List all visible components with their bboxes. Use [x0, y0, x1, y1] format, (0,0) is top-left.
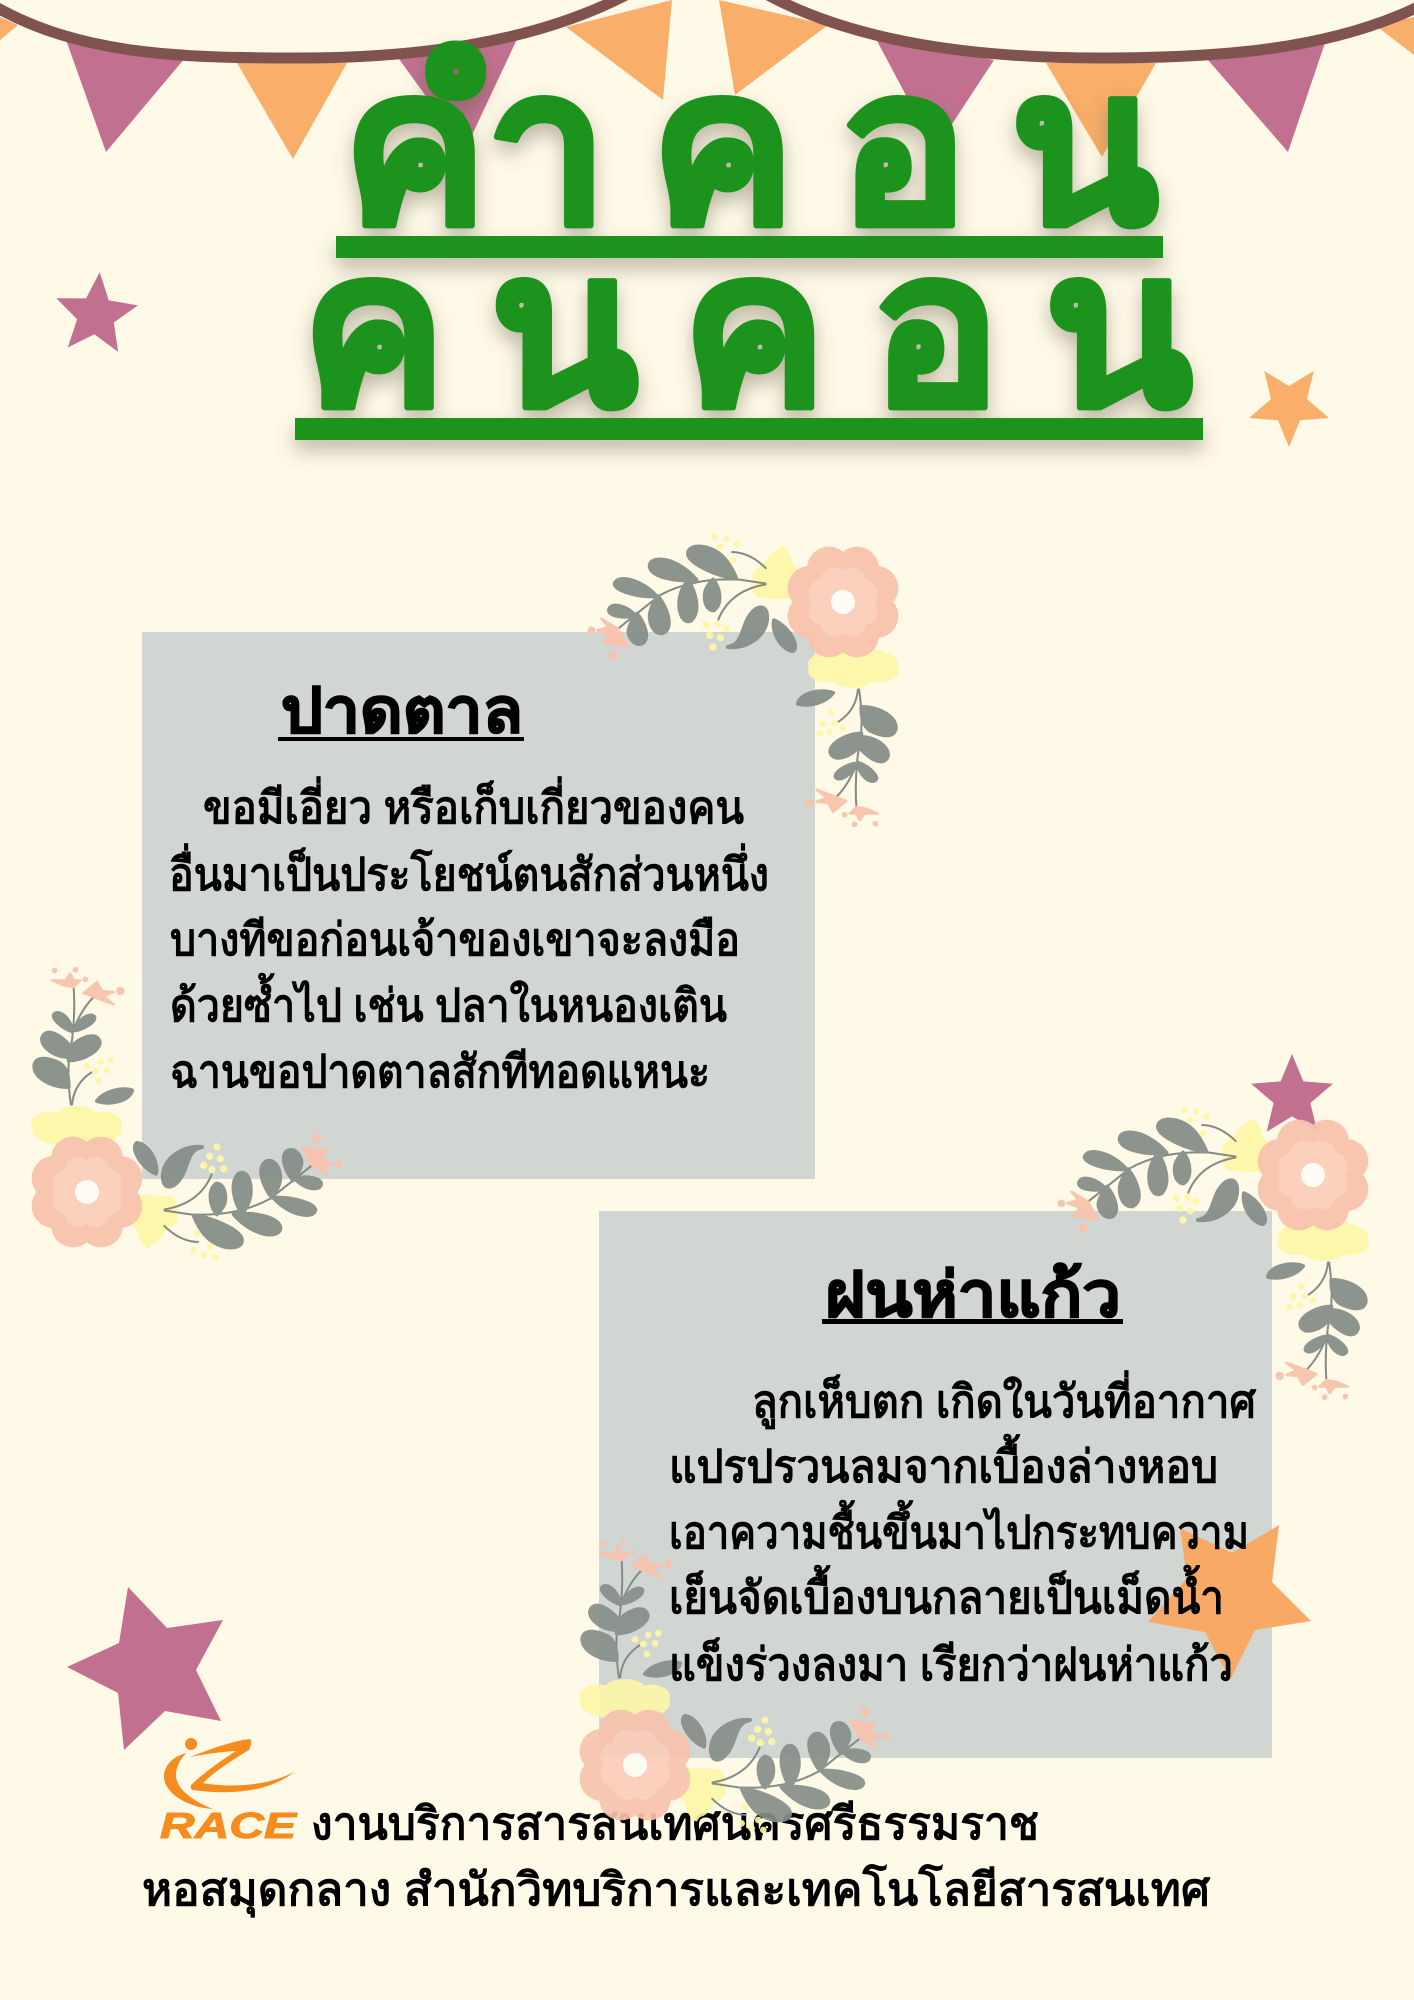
- flowers: first card top right: [589, 534, 899, 826]
- text block: first card: บางทีขอก่อนเจ้าของเขาจะลงมือ: [170, 914, 740, 965]
- text block: second card: [669, 1370, 1257, 1690]
- text block: first card: ฉานขอปาดตาลสักทีทอดแหนะ: [170, 1046, 710, 1097]
- footer text: [142, 1798, 1211, 1918]
- star: orange top right: [1249, 371, 1329, 447]
- text block: first card: อื่นมาเป็นประโยชน์ตนสักส่วนหนึ่ง: [169, 843, 769, 900]
- title line 1: คำคอน: [343, 27, 1158, 268]
- heading: first card: ปาดตาล: [281, 677, 523, 746]
- flowers: second card top right: [1059, 1107, 1369, 1399]
- text block: second card: ลูกเห็บตก เกิดในวันที่อากาศ: [752, 1370, 1257, 1430]
- heading: second card: ฝนห่าแก้ว: [825, 1261, 1121, 1330]
- text block: second card: เย็นจัดเบื้องบนกลายเป็นเม็ดน้ำ: [669, 1564, 1224, 1623]
- panel: first card background: [142, 632, 815, 1179]
- text block: second card: แข็งร่วงลงมา เรียกว่าฝนห่าแก้ว: [669, 1637, 1233, 1690]
- logo mark: [164, 1738, 294, 1809]
- logo wordmark: RACE: [160, 1805, 297, 1846]
- footer line 2: หอสมุดกลาง สำนักวิทบริการและเทคโนโลยีสารสนเทศ: [142, 1863, 1211, 1918]
- footer line 1: งานบริการสารสนเทศนครศรีธรรมราช: [311, 1798, 1039, 1849]
- star: pink top left: [52, 269, 140, 353]
- panel: second card background: [599, 1211, 1272, 1758]
- text block: second card: แปรปรวนลมจากเบื้องล่างหอบ: [669, 1433, 1218, 1492]
- bunting flags and strings: [0, 0, 1414, 159]
- star: large orange on second card: [1148, 1525, 1311, 1680]
- title line 2: คนคอน: [302, 209, 1192, 450]
- star: pink above second panel: [1251, 1054, 1333, 1132]
- title underline 2: [295, 418, 1203, 440]
- text block: second card: เอาความชื้นขึ้นมาไปกระทบความ: [669, 1499, 1249, 1558]
- title underline 1: [336, 236, 1163, 258]
- title: [295, 27, 1203, 450]
- text block: first card: ขอมีเอี่ยว หรือเก็บเกี่ยวของคน: [203, 776, 744, 833]
- text block: first card: ด้วยซ้ำไป เช่น ปลาในหนองเติน: [170, 972, 727, 1031]
- flowers: second card bottom left: [579, 1541, 889, 1833]
- star: large pink bottom left: [67, 1587, 223, 1750]
- flowers: first card bottom left: [31, 968, 341, 1260]
- text block: first card: [169, 776, 769, 1097]
- logo: RACE: [160, 1738, 297, 1846]
